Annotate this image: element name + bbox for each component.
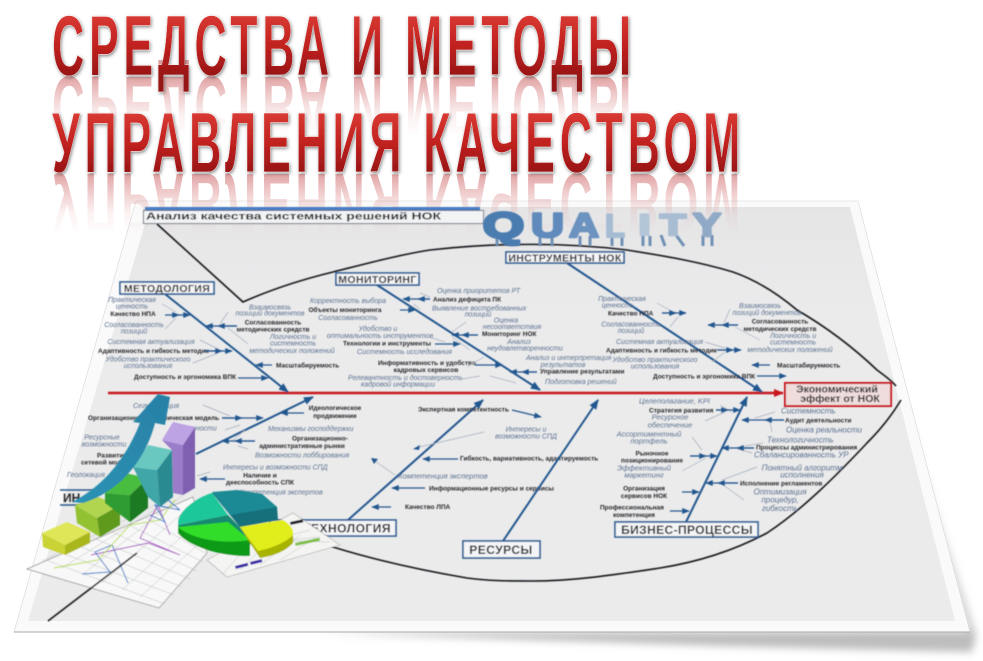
branch: business processes: исполнения (780, 470, 825, 480)
branch: monitoring: результатов (540, 362, 586, 369)
quality logo (483, 205, 721, 246)
branch: business processes: Системность (781, 406, 835, 416)
branch: monitoring: Удобство и (358, 325, 397, 333)
branch: instruments: Взаимосвязь (739, 303, 781, 310)
branch: methodology: Доступность и эргономика ВПК (134, 374, 236, 381)
branch: business processes: Рыночное (636, 450, 669, 458)
branch: instruments: методических средств (743, 326, 817, 333)
purple bar (162, 422, 195, 495)
quality logo: I (638, 209, 651, 242)
branch: monitoring: Анализ дефицита ПК (433, 296, 501, 304)
branch: infrastructure: Идеологическое (309, 405, 362, 412)
branch: resources: РЕСУРСЫ (469, 543, 533, 557)
branch: instruments: позиций документов (733, 309, 802, 317)
branch: methodology: системность (270, 340, 316, 348)
branch: business processes: сервисов НОК (621, 493, 667, 500)
branch: infrastructure: Наличие и (243, 472, 277, 480)
branch: infrastructure: Сегментация (133, 403, 179, 410)
branch: monitoring (308, 273, 624, 390)
branch: instruments: Согласованность (601, 322, 661, 328)
branch: instruments: Масштабируемость (777, 362, 840, 370)
branch: business processes: Ассортиментный (616, 430, 682, 438)
branch: instruments: Практическая (598, 296, 646, 303)
branch: instruments: Согласованность (752, 318, 808, 326)
branch: monitoring: Оценка приоритетов РТ (437, 288, 521, 295)
branch: methodology: Удобство практического (105, 356, 191, 364)
branch: business processes: Исполнение регламентов (740, 480, 822, 488)
branch: instruments: Качество НПА (608, 310, 654, 318)
branch: infrastructure: Возможности лоббирования (255, 452, 349, 460)
branch: technology: ТЕХНОЛОГИЯ (303, 522, 391, 536)
branch: monitoring: Оценка (494, 318, 518, 324)
branch: business processes: Оценка реальности (786, 426, 862, 434)
branch: infrastructure: Ресурсные (84, 434, 120, 442)
quality logo: A (569, 207, 599, 245)
diagram heading: Анализ качества системных решений НОК (146, 212, 442, 222)
branch: monitoring: кадровой информации (361, 380, 435, 388)
branch: methodology: Согласованность (245, 320, 301, 326)
branch: instruments: Логичность и (769, 333, 816, 340)
branch: infrastructure: Организационно-экономическая модель (88, 415, 219, 422)
yellow cube (42, 522, 90, 555)
branch: monitoring: Выявление востребованных (432, 304, 527, 312)
branch: business processes: Технологичность (767, 436, 834, 444)
branch: infrastructure (60, 397, 362, 505)
branch: monitoring: Управление результатами (540, 368, 624, 376)
branch: methodology: Адаптивность и гибкость методик (98, 347, 210, 355)
teal bar (133, 445, 173, 507)
branch: infrastructure: сетевой модели (81, 458, 133, 466)
branch: infrastructure: продвижение (313, 413, 357, 420)
branch: technology: Качество ЛПА (405, 504, 451, 511)
branch: technology (270, 400, 598, 536)
branch: instruments (506, 252, 840, 392)
branch: technology: Интересы и (506, 426, 546, 434)
growth arrow (72, 394, 170, 503)
branch: monitoring: Технологии и инструменты (343, 340, 432, 348)
branch: methodology: Взаимосвязь (249, 304, 291, 312)
branch: technology: Компетенция экспертов (398, 472, 488, 480)
branch: business processes: позиционирование (621, 458, 683, 464)
branch: methodology: позиций (121, 328, 147, 336)
branch: business processes: Эффективный (617, 464, 672, 472)
branch: monitoring: неудовлетворенности (487, 344, 563, 352)
branch: business processes: Понятный алгоритм (762, 464, 843, 472)
branch: instruments: Системная актуализация (616, 339, 703, 346)
branch: business processes: Процессы администрирования (756, 444, 857, 452)
diagram heading (144, 207, 484, 224)
branch: monitoring: кадровых сервисов (394, 367, 458, 374)
branch: business processes: Сбалансированность УР (754, 450, 849, 460)
3D charts illustration (27, 394, 340, 621)
branch: instruments: методических положений (747, 346, 833, 354)
branch: monitoring: МОНИТОРИНГ (338, 274, 417, 286)
branch: business processes: Аудит деятельности (785, 418, 851, 424)
effect box: Экономический (796, 384, 878, 396)
branch: infrastructure: ценности (184, 426, 217, 432)
branch: monitoring: Релевантность и достоверность (348, 374, 463, 382)
branch: monitoring: Информативность и удобство (378, 359, 476, 367)
line chart sheet (27, 495, 207, 608)
branch: methodology: методических положений (249, 347, 335, 355)
paper shadow (320, 400, 976, 652)
branch: infrastructure: Развитие (97, 452, 127, 460)
branch: technology: Гибкость, вариативность, адаптируемость (460, 454, 598, 462)
branch: infrastructure: дееспособность СПК (226, 478, 294, 486)
branch: instruments: Доступность и эргономика ВПК (653, 374, 755, 380)
branch: business processes: Ресурсное (652, 412, 688, 422)
branch: monitoring: Системность исследования (357, 348, 452, 356)
branch: methodology: Масштабируемость (276, 362, 339, 370)
branch: instruments: ИНСТРУМЕНТЫ НОК (508, 252, 622, 264)
quality logo: Q (483, 205, 524, 246)
branch: technology: Информационные ресурсы и сервисы (429, 486, 554, 492)
branch: monitoring: Анализ и интерпретация (525, 355, 612, 362)
branch: infrastructure: Геолокация (67, 472, 105, 479)
effect box (785, 383, 891, 406)
branch: monitoring: оптимальность инструментов (327, 333, 434, 340)
branch: infrastructure: Механизмы господдержки (268, 425, 354, 433)
branch: methodology: методических средств (236, 326, 310, 334)
branch: methodology: Логичность и (269, 334, 316, 341)
branch: monitoring: Объекты мониторинга (308, 306, 382, 314)
branch: methodology: Качество НПА (110, 311, 156, 318)
branch: monitoring: Согласованность (318, 315, 378, 322)
branch: technology: возможности СПД (495, 434, 557, 440)
title (52, 0, 745, 191)
pie chart (178, 490, 293, 558)
branch: business processes: компетенция (613, 512, 655, 519)
fishbone diagram (60, 207, 901, 581)
branch: infrastructure: Интересы и возможности СПД (223, 464, 328, 472)
branch: instruments: позиций (618, 327, 644, 335)
branch: business processes: обеспечение (648, 420, 692, 430)
title reflection (52, 58, 745, 250)
branch: infrastructure: ИН (63, 491, 80, 505)
branch: instruments: ценность (602, 302, 635, 310)
branch: monitoring: Мониторинг НОК (482, 331, 537, 338)
quality logo: T (660, 209, 686, 242)
branch: instruments: использования (631, 364, 680, 370)
green cube (105, 473, 148, 522)
branch: methodology (98, 282, 339, 392)
branch: methodology: позиций документов (236, 310, 305, 318)
branch: methodology: МЕТОДОЛОГИЯ (124, 283, 210, 295)
branch: infrastructure: Компетенция экспертов (240, 490, 323, 496)
branch: business processes: БИЗНЕС-ПРОЦЕССЫ (621, 523, 753, 537)
branch: methodology: Согласованность (104, 322, 164, 329)
gantt sheet (207, 513, 340, 577)
branch: technology: Экспертная компетентность (418, 406, 509, 414)
branch: business processes: процедур, (761, 496, 799, 504)
branch: business processes: Целеполагание, KPI (639, 396, 710, 406)
branch: business processes: маркетинг (624, 470, 664, 480)
branch: business processes: Профессиональная (600, 504, 664, 512)
branch: methodology: ценность (116, 304, 149, 310)
branch: business processes: Организация (623, 486, 665, 492)
branch: business processes: Оптимизация (753, 488, 807, 496)
branch: instruments: Удобство практического (612, 356, 698, 364)
quality logo: Y (693, 207, 721, 243)
branch: resources (463, 400, 598, 558)
branch: monitoring: несоответствия (483, 324, 541, 331)
branch: business processes (600, 396, 862, 537)
effect box: эффект от НОК (800, 393, 880, 405)
branch: monitoring: позиций (465, 310, 491, 318)
branch: instruments: Адаптивность и гибкость методик (606, 346, 718, 354)
quality logo: L (605, 208, 625, 244)
paper sheet (14, 201, 970, 632)
branch: business processes: портфель (630, 436, 668, 446)
branch: methodology: Системная актуализация (107, 339, 195, 346)
branch: business processes: Стратегия развития (649, 408, 714, 414)
branch: monitoring: Подготовка решений (545, 378, 617, 386)
branch: monitoring: Корректность выбора (310, 297, 386, 305)
branch: business processes: гибкость (762, 504, 798, 513)
branch: infrastructure: возможности (82, 442, 127, 448)
branch: methodology: Практическая (108, 297, 156, 304)
fish outline (157, 224, 901, 581)
quality logo: U (531, 207, 564, 245)
light green cube (75, 497, 120, 537)
main spine (108, 392, 783, 394)
branch: methodology: использования (124, 363, 173, 370)
branch: instruments: системность (770, 340, 816, 346)
branch: infrastructure: административные рынки (259, 443, 345, 450)
branch: monitoring: Анализ (506, 339, 531, 346)
branch: infrastructure: Организационно- (292, 436, 348, 442)
